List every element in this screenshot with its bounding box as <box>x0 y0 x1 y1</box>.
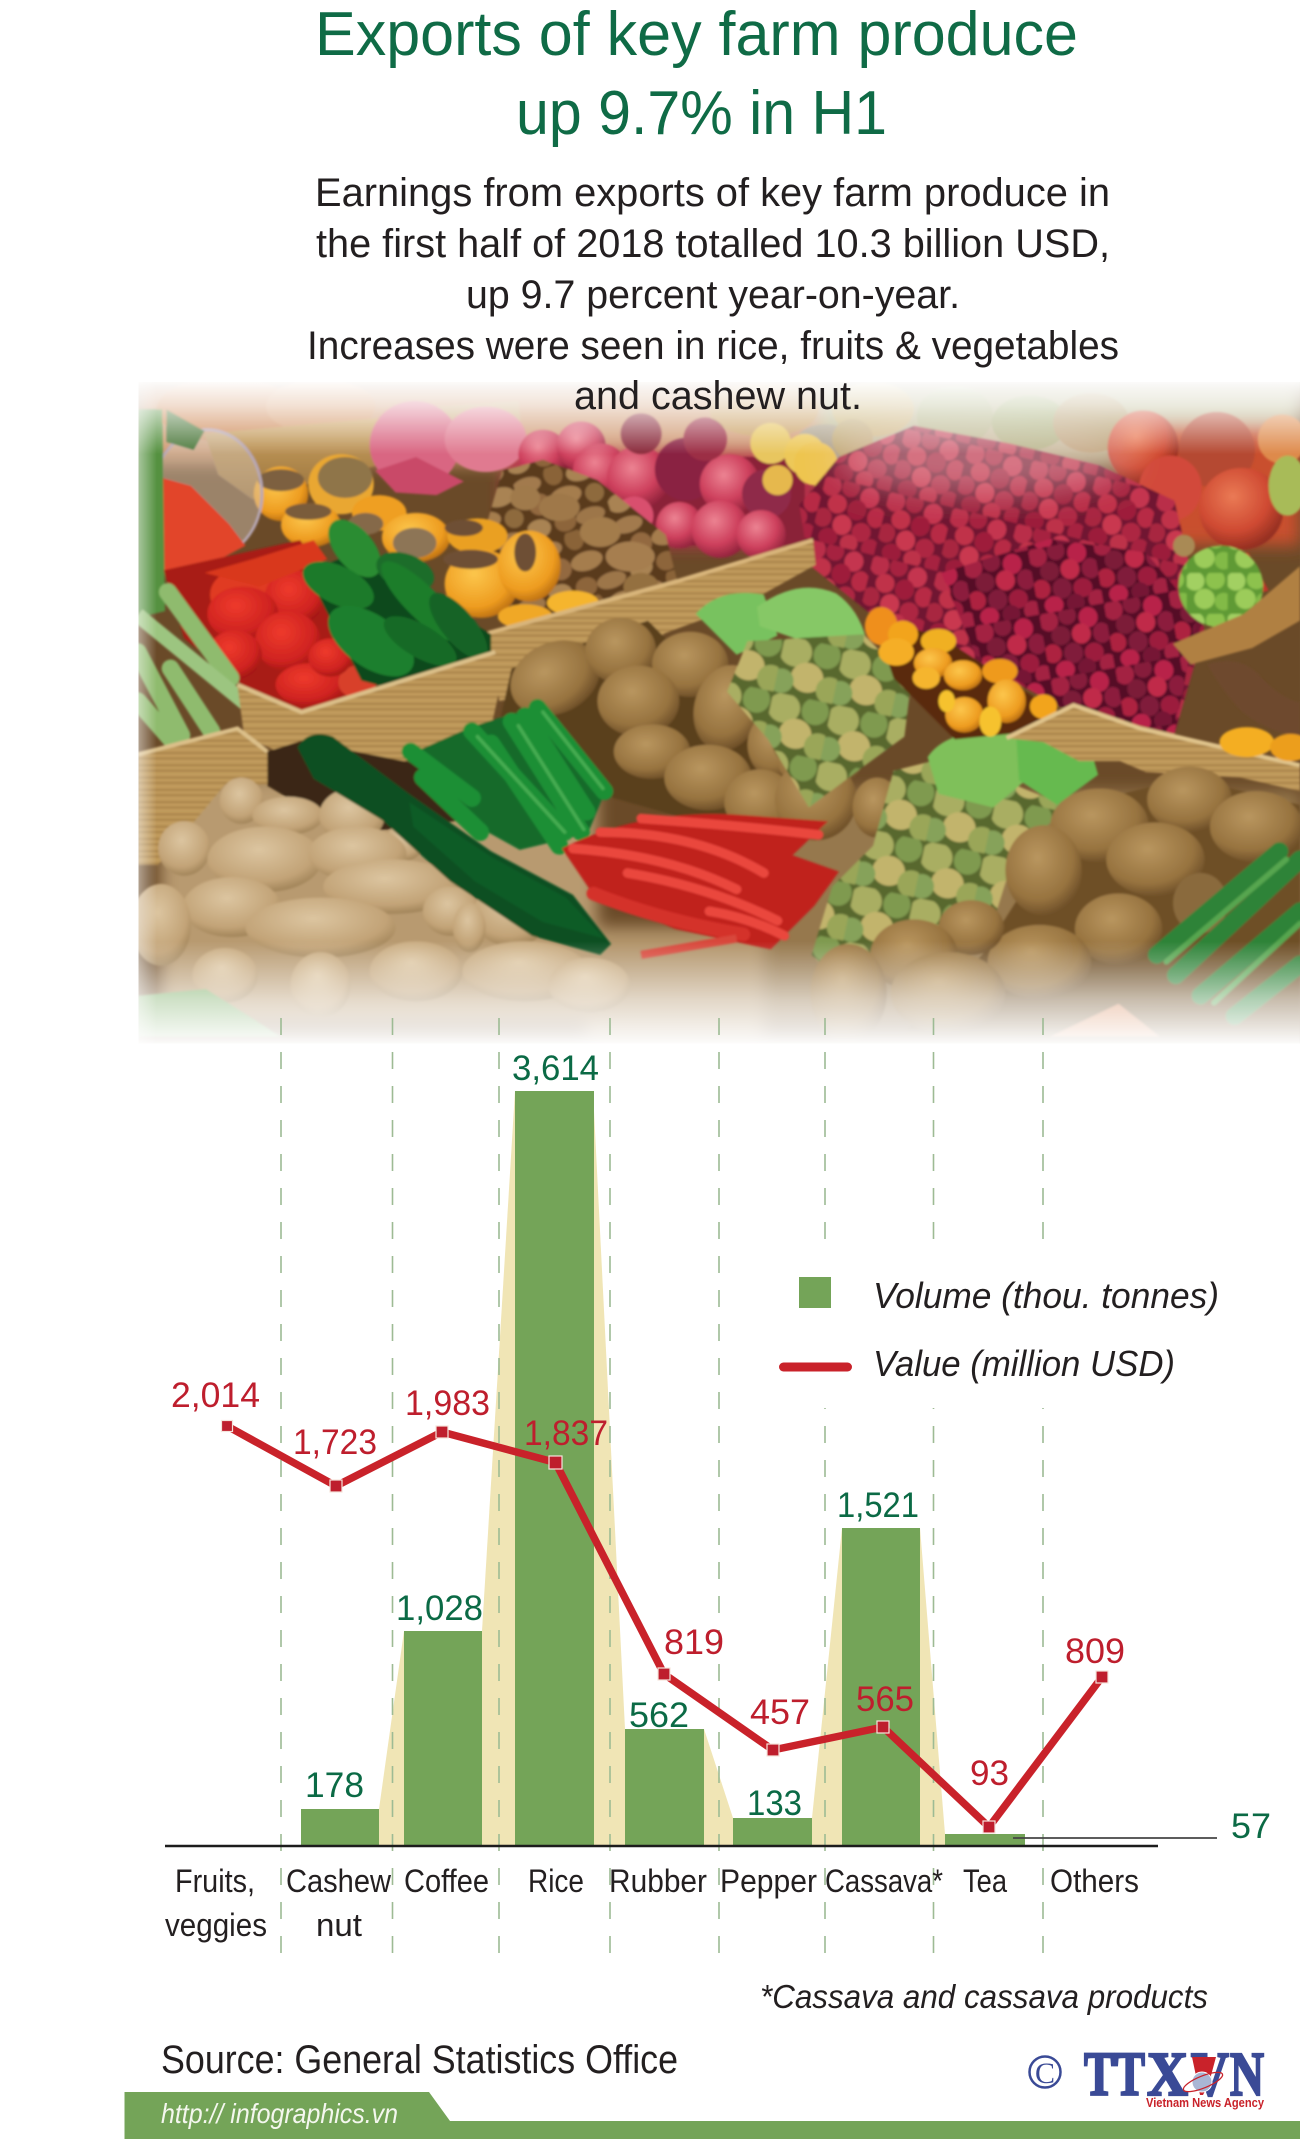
volume bars <box>301 1091 1025 1846</box>
top right red apples <box>1108 411 1179 484</box>
title: Exports of key farm produce <box>315 0 1078 69</box>
bar: pepper <box>733 1818 812 1846</box>
ginger <box>220 778 263 824</box>
soft colour base <box>138 382 1300 1044</box>
woven basket behind tamarind <box>488 540 816 701</box>
category labels: Tea <box>963 1863 1007 1899</box>
baseline axis <box>165 1845 1158 1847</box>
category labels: veggies <box>165 1907 267 1943</box>
red plums row <box>564 456 806 546</box>
wordmark: TT <box>1084 2041 1145 2109</box>
wordmark: V <box>1191 2041 1229 2109</box>
intro text <box>307 171 1119 418</box>
logo: TTXVN <box>1030 2041 1265 2110</box>
wordmark <box>1084 2041 1264 2109</box>
dark gap <box>267 741 465 833</box>
category labels: Rubber <box>609 1863 707 1899</box>
physalis <box>727 634 911 808</box>
right woven basket side <box>1173 566 1300 664</box>
category labels: Rice <box>528 1863 584 1899</box>
bar: coffee <box>404 1631 482 1846</box>
value labels: 809 <box>1065 1632 1125 1671</box>
bottom-left greens <box>138 989 281 1037</box>
category labels: Fruits, <box>175 1863 255 1899</box>
top baskets and pale fruit <box>163 408 281 440</box>
yellow fruit <box>750 423 791 464</box>
wordmark: N <box>1230 2041 1264 2109</box>
copyright symbol <box>1030 2056 1060 2090</box>
persimmons <box>254 467 308 521</box>
asparagus <box>138 592 231 745</box>
footer url: http:// infographics.vn <box>161 2098 398 2129</box>
intro text: Earnings from exports of key farm produce in <box>315 171 1110 215</box>
value labels: 2,014 <box>171 1376 260 1415</box>
legend <box>779 1275 1219 1384</box>
category labels: nut <box>316 1907 362 1943</box>
red chillies <box>562 814 839 949</box>
globe emblem <box>1181 2069 1225 2095</box>
intro text: and cashew nut. <box>574 374 862 418</box>
value labels: 457 <box>750 1693 810 1732</box>
intro text: the first half of 2018 totalled 10.3 billion USD, <box>316 222 1110 266</box>
legend text: Volume (thou. tonnes) <box>873 1275 1219 1316</box>
title <box>315 0 1078 148</box>
dragon fruit <box>368 402 456 474</box>
category labels: Cassava* <box>825 1863 943 1899</box>
volume labels: 57 <box>1231 1807 1271 1846</box>
intro text: Increases were seen in rice, fruits & vegetables <box>307 324 1119 368</box>
volume labels: 178 <box>305 1766 364 1805</box>
basket under peppers <box>237 652 501 767</box>
green peppers <box>318 558 492 686</box>
green beans right <box>1157 851 1300 1016</box>
bar: rice <box>515 1091 594 1846</box>
right kiwis <box>979 788 1300 1016</box>
bar: cassava <box>842 1528 920 1846</box>
copyright symbol: C <box>1035 2057 1055 2090</box>
value line <box>227 1426 1102 1827</box>
green grapes <box>1179 546 1263 627</box>
value labels: 565 <box>856 1680 914 1719</box>
tamarind pile <box>487 459 678 612</box>
white legend backing <box>735 1240 1235 1408</box>
red peppers <box>162 539 356 711</box>
bar: tea <box>945 1834 1025 1846</box>
leader line for 57 <box>1013 1837 1217 1839</box>
grapes <box>799 426 1205 734</box>
volume labels: 3,614 <box>512 1049 599 1088</box>
middle kiwis <box>501 620 755 815</box>
red V accent <box>1192 2057 1216 2095</box>
photo: fruit and vegetable market stall <box>131 376 1300 1046</box>
category labels: Cashew <box>286 1863 392 1899</box>
legend swatch: value <box>779 1362 852 1372</box>
right basket <box>1007 705 1300 791</box>
legend text: Value (million USD) <box>873 1343 1175 1384</box>
volume labels: 562 <box>629 1696 689 1735</box>
source: Source: General Statistics Office <box>161 2038 678 2082</box>
category labels: Coffee <box>404 1863 489 1899</box>
wordmark: X <box>1147 2041 1188 2109</box>
vertical dashed guide lines <box>281 1018 1043 1953</box>
volume labels: 1,028 <box>396 1589 483 1628</box>
glass bowl and left leaf <box>162 431 261 542</box>
category labels: Pepper <box>720 1863 817 1899</box>
legend text <box>873 1275 1219 1384</box>
agency name: Vietnam News Agency <box>1146 2095 1265 2110</box>
title: up 9.7% in H1 <box>516 79 887 148</box>
value labels: 1,837 <box>524 1414 608 1453</box>
legend swatch: volume <box>799 1277 831 1308</box>
fades <box>138 379 1300 454</box>
footer band <box>124 2092 1300 2139</box>
value markers <box>222 1420 1108 1833</box>
value labels <box>171 1376 1125 1793</box>
bar: cashew nut <box>301 1809 379 1846</box>
value labels: 1,723 <box>293 1423 377 1462</box>
volume labels: 1,521 <box>837 1486 919 1525</box>
value labels: 93 <box>970 1754 1009 1793</box>
small oranges <box>888 629 1040 740</box>
value labels: 1,983 <box>405 1384 490 1423</box>
beige connector areas between bars <box>379 1091 945 1846</box>
green leaves <box>696 593 778 655</box>
cassava root <box>1284 732 1300 736</box>
value labels: 819 <box>664 1623 724 1662</box>
footnote: *Cassava and cassava products <box>760 1978 1208 2015</box>
volume labels <box>305 1049 1271 1846</box>
category labels <box>165 1863 1139 1943</box>
bar: rubber <box>625 1729 704 1846</box>
basket lower-left <box>138 728 267 865</box>
green cucumbers and small peppers <box>297 734 611 955</box>
volume labels: 133 <box>747 1784 802 1823</box>
category labels: Others <box>1050 1863 1139 1899</box>
intro text: up 9.7 percent year-on-year. <box>466 273 960 317</box>
